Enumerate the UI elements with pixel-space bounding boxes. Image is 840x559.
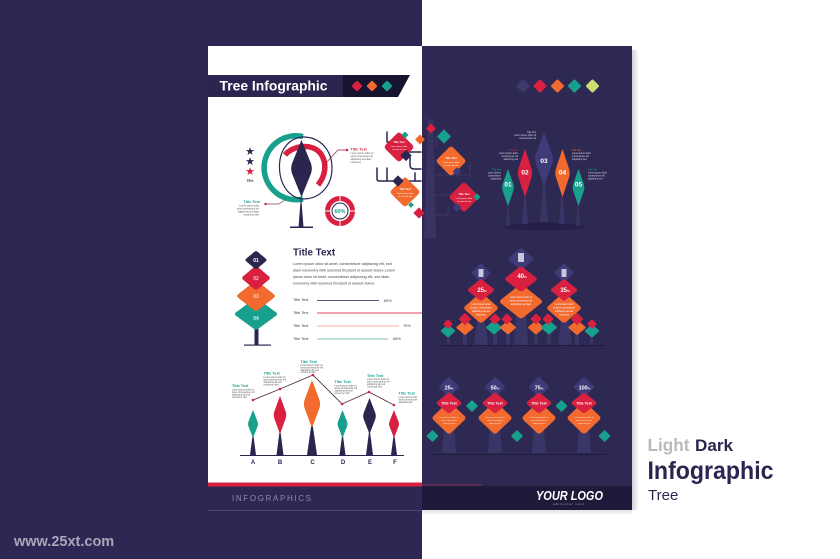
- teal accents: [426, 400, 611, 442]
- red block right: [448, 181, 480, 213]
- red labels: [441, 402, 593, 406]
- side caption: Tree: [648, 487, 678, 504]
- numbers: 03: [540, 158, 548, 165]
- callout: teal title text: amet consectetur elit: [237, 208, 259, 210]
- small accent diamonds: [392, 124, 481, 219]
- data labels: adipiscing elit sed: [334, 390, 353, 392]
- data labels: adipiscing elit: [398, 401, 413, 404]
- body text: Lorem ipsum dolor sit: [485, 416, 505, 419]
- orange block with text: Title Text: [399, 187, 411, 191]
- leaf body text: sit amet consectetuer: [470, 306, 492, 310]
- body text: adipiscing elit: [578, 422, 590, 425]
- numbers: 05: [575, 182, 582, 188]
- data labels: Title Text: [232, 384, 249, 388]
- line 68%: [293, 336, 401, 341]
- data labels: Lorem ipsum dolor: [398, 396, 418, 399]
- captions: adipiscing sed: [588, 178, 603, 180]
- body text: Lorem ipsum dolor sit: [574, 416, 594, 419]
- data labels: Title Text: [300, 360, 318, 364]
- leaves: [502, 169, 514, 206]
- line 65%: Title Text: [293, 297, 309, 302]
- callout: red title text: [325, 148, 374, 164]
- donut gauge 60%: [325, 196, 355, 226]
- red labels: Title Text: [487, 402, 504, 406]
- data labels: [232, 360, 418, 404]
- orange block right: [435, 145, 467, 177]
- panel: light page: [208, 46, 422, 484]
- orange leaves: [463, 284, 582, 324]
- data labels: adipiscing elit sed: [367, 383, 386, 386]
- body paragraph: ipsum dolor sit amet, consectetuer adipiscing elit, sed diam: [293, 275, 389, 279]
- ground: [504, 222, 584, 230]
- light page footer: [208, 482, 422, 511]
- captions: Lorem ipsum: [488, 172, 501, 174]
- line 65%: 65%: [384, 298, 392, 303]
- dark branches on white: [377, 132, 421, 181]
- callout: red title text: adipiscing sed diam: [350, 158, 372, 161]
- data labels: Lorem ipsum dolor sit: [334, 384, 357, 388]
- percentages: 35%: [560, 288, 570, 294]
- leaf body text: adipiscing elit sed: [472, 310, 491, 313]
- rating stars: [245, 146, 255, 183]
- rating stars: ★: [245, 166, 255, 178]
- callout: red title text: amet consectetur elit: [350, 155, 373, 158]
- body text: amet consectetuer: [576, 419, 593, 422]
- captions: adipiscing: [491, 178, 502, 180]
- callout: teal title text: [237, 199, 286, 216]
- data labels: Title Text: [398, 392, 416, 396]
- rating stars: ★: [245, 156, 255, 168]
- small trees: [440, 313, 600, 338]
- branching tree across the pages: [377, 115, 481, 238]
- side caption: [648, 435, 774, 504]
- dark page footer: [422, 484, 632, 510]
- body text: amet consectetuer: [441, 419, 458, 422]
- line 68%: 68%: [393, 336, 401, 341]
- red ring arc: [285, 147, 325, 185]
- layer 04: [234, 298, 278, 330]
- side caption: Dark: [695, 436, 734, 455]
- title: Tree Infographic: [220, 78, 328, 94]
- callout: teal title text: nonummy nibh: [243, 214, 260, 216]
- captions: consectetuer elit: [501, 155, 518, 158]
- captions: Title Text: [509, 149, 518, 152]
- captions: consectetuer elit: [572, 155, 589, 158]
- donut gauge 60%: 60%: [334, 209, 346, 215]
- red block with text: Title Text: [393, 140, 405, 144]
- leaf body text: Lorem ipsum dolor: [554, 303, 574, 306]
- data labels: Title Text: [334, 380, 352, 384]
- trunk: [298, 195, 304, 227]
- callout: teal title text: Title Text: [244, 200, 261, 204]
- red labels: Title Text: [441, 402, 458, 406]
- data labels: adipiscing elit sed: [264, 381, 282, 384]
- trunks: [506, 175, 580, 226]
- line 68%: Title Text: [293, 336, 309, 341]
- orange block right: sit amet elit sed: [444, 164, 458, 167]
- orange block with text: Lorem ipsum dolor: [397, 193, 414, 195]
- data labels: adipiscing elit sed: [232, 394, 251, 396]
- numbers: 02: [521, 170, 529, 176]
- red block right: Lorem ipsum dolor: [456, 198, 473, 200]
- light page footer: INFOGRAPHICS: [232, 494, 311, 503]
- spindle trees 01-05: [488, 131, 607, 230]
- ring tree chart: [264, 136, 332, 228]
- data labels: amet consectetuer elit: [264, 378, 286, 382]
- line 65%: [293, 297, 392, 303]
- rating stars: 75%: [246, 179, 254, 183]
- layer 02: [241, 265, 271, 291]
- layer 01: [245, 250, 267, 270]
- leaf body text: Lorem ipsum dolor sit: [510, 296, 532, 299]
- axis letters: C: [310, 460, 315, 466]
- red leaves: [436, 392, 597, 414]
- captions: Lorem ipsum dolor: [572, 152, 591, 155]
- line 75%: 75%: [403, 323, 411, 328]
- leaf body text: adipiscing sed diam: [511, 304, 531, 306]
- orange block with text: sit amet elit sed: [398, 195, 412, 198]
- four percentage trees: [426, 376, 611, 455]
- axis letters: D: [341, 460, 346, 466]
- leaf body text: nonummy: [476, 314, 487, 316]
- captions: [488, 131, 607, 180]
- data labels: nonummy nibh: [367, 386, 383, 388]
- line red: Title Text: [293, 310, 309, 315]
- leaf body text: adipiscing elit sed: [555, 310, 574, 313]
- captions: adipiscing sed: [503, 159, 519, 161]
- leaf body text: sit amet consectetuer: [553, 306, 575, 310]
- data labels: amet consectetuer elit: [334, 387, 357, 390]
- red block with text: sit amet elit sed: [392, 148, 406, 151]
- body paragraph: diam nonummy nibh euismod tincidunt ut laoreet dolore Lorem: [293, 268, 395, 272]
- teal ring arc: [264, 136, 303, 200]
- dark page footer: editorial text: [553, 502, 585, 506]
- data labels: Lorem ipsum dolor sit: [367, 378, 389, 381]
- thin ring: [303, 137, 332, 199]
- data labels: amet consectetuer elit: [232, 391, 255, 394]
- trunks: [250, 420, 397, 455]
- body paragraph: Lorem ipsum dolor sit amet, consectetuer adipiscing elit, sed: [293, 262, 392, 266]
- captions: Title Text: [492, 168, 501, 172]
- data labels: amet consectetuer elit: [367, 380, 390, 384]
- percentages: 25%: [477, 288, 487, 294]
- body text: adipiscing elit: [489, 422, 501, 425]
- leaf body text: nonummy: [559, 314, 570, 316]
- data labels: Lorem ipsum dolor sit: [264, 376, 286, 379]
- captions: consectetuer elit: [519, 137, 536, 140]
- data labels: nonummy nibh: [232, 397, 248, 399]
- red block with text: Lorem ipsum dolor: [391, 146, 408, 148]
- data labels: nonummy nibh: [264, 384, 279, 386]
- trunks: [442, 430, 591, 453]
- red labels: Title Text: [576, 402, 593, 406]
- forest of diamond trees with percentages: [440, 248, 605, 346]
- stacked diamond tree: [234, 250, 278, 346]
- line 75%: Title Text: [293, 323, 309, 328]
- callout: teal title text: Lorem ipsum dolor: [239, 204, 259, 208]
- progress lines: [293, 297, 422, 341]
- orange leaves: [431, 401, 602, 435]
- layer 03: [236, 280, 276, 312]
- side caption: Light: [648, 435, 690, 455]
- logo: YOUR LOGO: [536, 489, 603, 503]
- numbers: 01: [504, 182, 512, 188]
- leaves: [248, 410, 258, 438]
- red block right: sit amet elit sed: [457, 200, 471, 203]
- watermark: www.25xt.com: [13, 534, 114, 550]
- leaf body text: amet consectetuer elit: [510, 300, 533, 302]
- captions: consectetuer: [488, 174, 501, 178]
- percentages: 100%: [579, 386, 591, 392]
- stacked diamond tree: 01: [253, 258, 259, 264]
- axis letters: E: [368, 460, 372, 466]
- axis letters: B: [278, 460, 283, 466]
- red block right: Title Text: [458, 192, 470, 196]
- data labels: amet consectetuer: [398, 398, 418, 402]
- palette diamonds: [516, 79, 600, 93]
- trend line: [253, 375, 394, 405]
- captions: consectetuer elit: [588, 174, 605, 178]
- captions: Title Text: [572, 149, 581, 152]
- captions: adipiscing sed: [572, 159, 587, 161]
- body text: Lorem ipsum dolor sit: [439, 416, 459, 419]
- body text: adipiscing elit: [533, 422, 545, 425]
- percentages: 50%: [491, 386, 500, 392]
- body text: Lorem ipsum dolor sit: [529, 416, 549, 419]
- dark tops: [438, 376, 595, 398]
- callout: teal title text: adipiscing sed diam: [238, 210, 259, 214]
- numbers: 04: [559, 170, 566, 176]
- title banner: [208, 75, 410, 97]
- percentages: 25%: [445, 386, 454, 392]
- body text: [439, 416, 594, 425]
- data labels: Title Text: [367, 374, 384, 378]
- data labels: nonummy nibh: [300, 372, 316, 374]
- body text: amet consectetuer: [487, 419, 504, 422]
- stacked diamond tree: 04: [253, 316, 259, 322]
- red leaves: [467, 266, 578, 301]
- banner diamonds: [351, 80, 393, 92]
- orange block with text: [389, 176, 421, 208]
- baseline: [240, 455, 404, 456]
- data labels: amet consectetuer elit: [300, 366, 323, 370]
- icon tops: [471, 248, 574, 283]
- icon: clipboards: [478, 253, 566, 277]
- data labels: Lorem ipsum dolor sit: [300, 364, 323, 367]
- percentages: [445, 386, 591, 392]
- red block with text: [383, 131, 415, 163]
- body text: amet consectetuer: [531, 419, 548, 422]
- spindle tree chart A-F: [232, 360, 418, 466]
- percentages: 75%: [535, 386, 544, 392]
- callout: red title text: Title Text: [350, 148, 368, 152]
- data labels: Lorem ipsum dolor sit: [232, 388, 254, 392]
- trunks: [447, 310, 593, 345]
- callout: red title text: Lorem ipsum dolor sit: [350, 152, 374, 155]
- captions: Lorem ipsum dolor: [588, 172, 607, 174]
- side caption: Infographic: [648, 457, 774, 485]
- captions: Lorem ipsum dolor: [499, 152, 518, 155]
- captions: Title Text: [527, 131, 536, 134]
- rating stars: ★: [245, 146, 255, 158]
- captions: Lorem ipsum dolor sit: [514, 134, 536, 137]
- body text: adipiscing elit: [443, 422, 455, 425]
- trunk and light branches: [425, 115, 470, 215]
- line 75%: [293, 323, 411, 328]
- data labels: Title Text: [264, 372, 281, 376]
- data labels: nonummy nibh: [334, 393, 350, 395]
- orange block right: Lorem ipsum dolor: [443, 162, 460, 164]
- captions: Title Text: [588, 168, 597, 172]
- leaf: [291, 140, 312, 197]
- body paragraph: [293, 262, 395, 286]
- axis letters: [251, 460, 397, 466]
- axis letters: F: [393, 460, 397, 466]
- heading: Title Text: Title Text: [293, 248, 336, 258]
- stacked diamond tree: 03: [253, 294, 259, 300]
- dark background band: [0, 0, 422, 559]
- percentages: 40%: [517, 274, 527, 280]
- axis letters: A: [251, 460, 256, 466]
- leaf body text: [470, 296, 575, 316]
- leaf body text: Lorem ipsum dolor: [471, 303, 491, 306]
- panel: dark page: [422, 46, 632, 486]
- data labels: adipiscing elit sed: [300, 369, 319, 372]
- orange block right: Title Text: [445, 156, 457, 160]
- percentages: [477, 274, 570, 294]
- numbers: [504, 158, 582, 188]
- callout: red title text: nonummy: [350, 161, 362, 164]
- red labels: Title Text: [531, 402, 548, 406]
- stacked diamond tree: 02: [253, 276, 259, 282]
- body paragraph: nonummy nibh euismod tincidunt ut laoreet dolore: [293, 282, 375, 286]
